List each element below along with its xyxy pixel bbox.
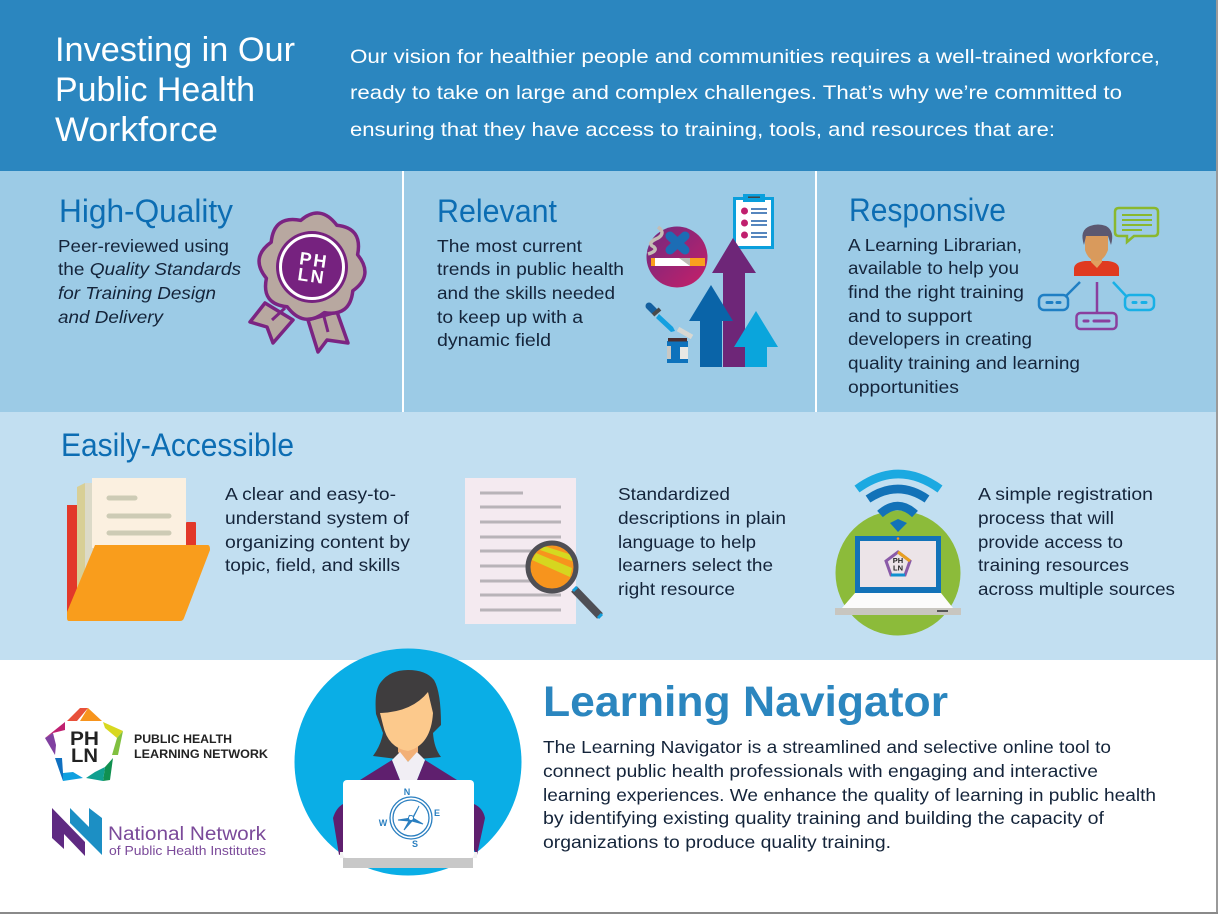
text: responsive description: developers in creating	[848, 329, 1032, 349]
text: organizing content: understand system of	[225, 508, 409, 528]
text: responsive description: find the right training	[848, 282, 1024, 302]
icon: award ribbon badge: LN	[296, 264, 327, 288]
text: learning navigator description: by identifying existing quality training and building the capacity of	[543, 808, 1104, 828]
icon: compass	[379, 787, 440, 849]
icon: compass: S	[412, 839, 418, 849]
text: learning navigator description: connect public health professionals with engaging and interactive	[543, 761, 1098, 781]
logo: public health learning network: LN	[71, 746, 98, 767]
text: plain language: learners select the	[618, 555, 773, 575]
panel: responsive	[817, 171, 1216, 412]
logo: public health learning network: PUBLIC HEALTH	[134, 732, 232, 746]
icon: no smoking circle	[646, 226, 708, 288]
logo: national network of public health institutes: of Public Health Institutes	[109, 844, 266, 858]
text: plain language: descriptions in plain	[618, 508, 786, 528]
text: plain language: language to help	[618, 532, 756, 552]
illustration: woman with laptop	[294, 648, 522, 876]
panel: high-quality	[0, 171, 402, 412]
text: plain language: Standardized	[618, 484, 730, 504]
text: registration	[978, 484, 1175, 599]
title: Investing in Our	[55, 31, 295, 69]
heading: learning navigator: Learning Navigator	[543, 678, 948, 726]
icon: growth arrows	[689, 238, 778, 367]
heading: high-quality: High-Quality	[59, 193, 233, 229]
text: learning navigator description	[543, 737, 1156, 852]
text: high-quality description	[58, 236, 241, 327]
text: responsive description: and to support	[848, 306, 972, 326]
text: relevant description: The most current	[437, 236, 582, 256]
logo: national network of public health institutes	[52, 808, 267, 858]
text: relevant description: and the skills needed	[437, 283, 615, 303]
icon: award ribbon badge: PH	[298, 248, 330, 272]
text: relevant description: dynamic field	[437, 330, 551, 350]
text: responsive description: quality training and learning	[848, 353, 1080, 373]
text: organizing content: topic, field, and skills	[225, 555, 400, 575]
text: registration: provide access to	[978, 532, 1123, 552]
icon: wifi laptop: LN	[893, 564, 903, 572]
intro text: Our vision for healthier people and communities requires a well-trained workforce,	[350, 46, 1160, 68]
icon: award ribbon badge	[250, 213, 365, 352]
logo: public health learning network	[45, 708, 268, 781]
title: Workforce	[55, 111, 218, 149]
text: high-quality description: for Training Design	[58, 283, 216, 303]
icon: document with magnifying glass	[465, 478, 602, 624]
text: registration: process that will	[978, 508, 1114, 528]
text: responsive description: opportunities	[848, 377, 959, 397]
text: responsive description: A Learning Librarian,	[848, 235, 1022, 255]
icon: compass: W	[379, 818, 388, 828]
heading: responsive: Responsive	[849, 192, 1006, 228]
icon: wifi laptop	[835, 474, 961, 636]
text: responsive description: available to help you	[848, 258, 1019, 278]
logo: public health learning network: LEARNING NETWORK	[134, 747, 268, 761]
text: high-quality description: Peer-reviewed using	[58, 236, 229, 256]
icon: librarian network	[1039, 208, 1158, 329]
icon: wifi laptop: PH	[893, 556, 903, 565]
intro text: ensuring that they have access to training, tools, and resources that are:	[350, 119, 1055, 141]
intro text: ready to take on large and complex challenges. That’s why we’re committed to	[350, 82, 1122, 104]
icon: open folder	[67, 478, 210, 621]
text: plain language	[618, 484, 786, 599]
text: organizing content	[225, 484, 410, 575]
icon: compass: E	[434, 808, 440, 818]
text: high-quality description: and Delivery	[58, 307, 164, 327]
text: plain language: right resource	[618, 579, 735, 599]
text: organizing content: organizing content by	[225, 532, 410, 552]
logo: national network of public health institutes: National Network	[108, 824, 267, 845]
icon: dropper and bottle	[649, 306, 692, 363]
intro text	[350, 46, 1160, 141]
title	[55, 31, 295, 149]
text: relevant description: to keep up with a	[437, 307, 583, 327]
text: organizing content: A clear and easy-to-	[225, 484, 396, 504]
text: registration: across multiple sources	[978, 579, 1175, 599]
text: registration: A simple registration	[978, 484, 1153, 504]
text: responsive description	[848, 235, 1080, 397]
panel: relevant	[404, 171, 815, 412]
text: registration: training resources	[978, 555, 1129, 575]
panel: easily-accessible	[0, 412, 1216, 660]
text: relevant description: trends in public health	[437, 259, 624, 279]
text: relevant description	[437, 236, 624, 350]
heading: relevant: Relevant	[437, 193, 557, 229]
heading: easily-accessible: Easily-Accessible	[61, 427, 294, 463]
text: high-quality description: the Quality Standards	[58, 259, 241, 279]
icon: compass: N	[404, 787, 410, 797]
panel: header banner	[0, 0, 1216, 171]
text: learning navigator description: organizations to produce quality training.	[543, 832, 891, 852]
text: learning navigator description: learning experiences. We enhance the quality of learning in public health	[543, 785, 1156, 805]
icon: clipboard checklist	[734, 194, 772, 248]
logo: public health learning network: PH	[70, 729, 99, 750]
text: learning navigator description: The Learning Navigator is a streamlined and selective online tool to	[543, 737, 1111, 757]
title: Public Health	[55, 71, 255, 109]
